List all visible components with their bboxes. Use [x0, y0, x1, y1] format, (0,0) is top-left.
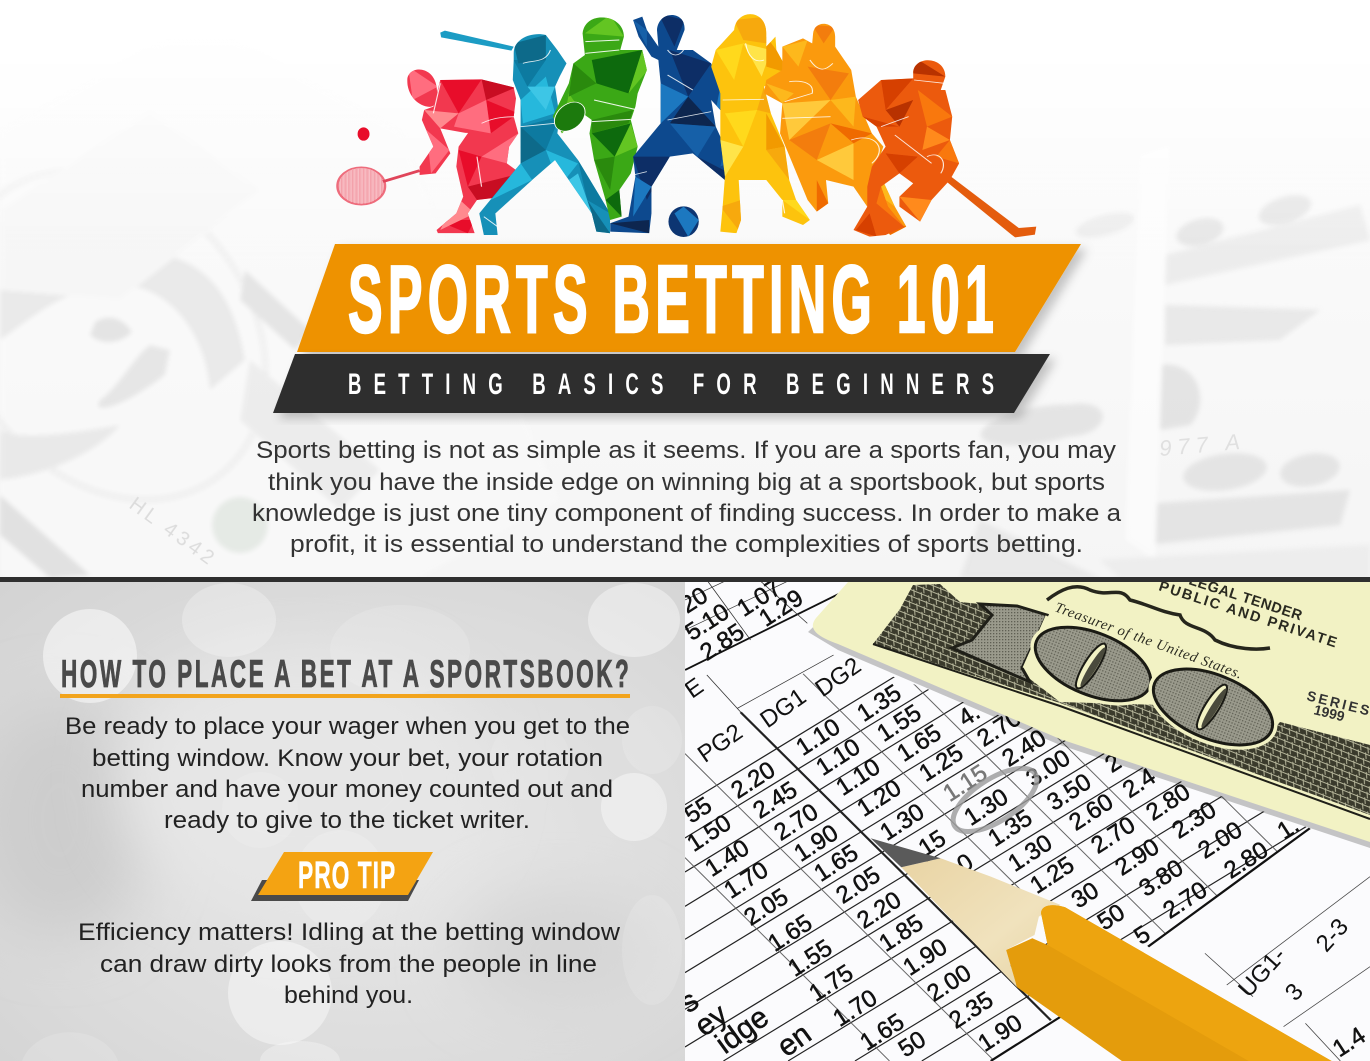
second zero	[1148, 668, 1278, 750]
faint note serial: HL 4342	[125, 493, 221, 572]
odds numbers: 30	[1067, 877, 1104, 914]
odds numbers: 2.70	[1158, 876, 1212, 924]
odds numbers: UG1-	[1233, 942, 1292, 1003]
pro tip text	[78, 919, 620, 1009]
banknote background	[0, 0, 1370, 578]
odds numbers: 1.35	[983, 804, 1037, 852]
odds numbers: E	[680, 673, 709, 704]
odds numbers: 1.85	[874, 909, 928, 957]
intro paragraph: Sports betting is not as simple as it seems. If you are a sports fan, you may	[256, 437, 1117, 464]
first zero	[1030, 626, 1152, 706]
odds numbers: 2.70	[769, 798, 823, 846]
icon: rainbow polygon sports players	[337, 10, 1036, 238]
pro tip badge: PRO TIP	[298, 854, 395, 896]
odds numbers: 2.00	[922, 959, 976, 1007]
pro tip text: behind you.	[284, 982, 413, 1009]
icon: boxer	[709, 10, 812, 233]
hundred dollar bill: LEGAL TENDER	[1187, 573, 1304, 624]
odds numbers: 15	[914, 825, 951, 862]
odds numbers: 1.30	[959, 783, 1013, 831]
odds numbers: DG2	[810, 652, 866, 703]
photo: odds sheet, hundred dollar bill and pencil	[673, 573, 1370, 1061]
odds numbers: 1.20	[852, 774, 906, 822]
subtitle text: BETTING BASICS FOR BEGINNERS	[348, 368, 994, 401]
numeral one	[952, 604, 1047, 682]
odds numbers: 1.29	[754, 584, 808, 632]
odds numbers: 2.40	[997, 724, 1051, 772]
odds numbers: 1.35	[852, 679, 906, 727]
odds numbers: 2.4	[1118, 763, 1161, 804]
body text	[65, 713, 630, 834]
heading: HOW TO PLACE A BET AT A SPORTSBOOK?	[61, 652, 629, 696]
body text: betting window. Know your bet, your rotation	[92, 745, 603, 772]
odds numbers: 2.70	[1086, 811, 1140, 859]
icon: american football player	[548, 13, 649, 223]
intro paragraph	[252, 437, 1121, 558]
hundred dollar bill: SERIES	[1305, 687, 1370, 718]
pro tip badge	[251, 852, 433, 901]
odds numbers: 3.50	[1042, 768, 1096, 816]
odds numbers: 2.20	[726, 756, 780, 804]
pro tip text: can draw dirty looks from the people in line	[100, 951, 597, 978]
odds numbers: 1.55	[783, 934, 837, 982]
odds numbers: 2.60	[1064, 788, 1118, 836]
odds numbers: 2.45	[748, 776, 802, 824]
odds numbers: 1.10	[811, 733, 865, 781]
odds numbers: 2.05	[831, 861, 885, 909]
odds numbers: 1.65	[892, 719, 946, 767]
odds numbers: PG2	[693, 719, 748, 768]
intro paragraph: knowledge is just one tiny component of finding success. In order to make a	[252, 500, 1121, 527]
odds numbers: 2.90	[1110, 833, 1164, 881]
signature	[1047, 587, 1270, 649]
odds numbers: 1.10	[831, 753, 885, 801]
faint note serial right: 977 A	[1158, 429, 1247, 461]
hundred dollar bill: 1999	[1312, 701, 1347, 724]
odds numbers: 1.30	[1003, 829, 1057, 877]
subtitle banner	[273, 354, 1050, 413]
odds numbers: 2.20	[852, 886, 906, 934]
hundred dollar bill	[808, 573, 1370, 848]
odds numbers: 1.25	[914, 739, 968, 787]
odds numbers: idge	[710, 1000, 775, 1060]
odds numbers: 2.30	[1167, 796, 1221, 844]
title banner	[297, 244, 1081, 353]
odds table grid	[685, 580, 1370, 1061]
icon: opposing boxer	[762, 20, 909, 237]
icon: hockey player with stick	[851, 57, 1036, 238]
body text: Be ready to place your wager when you get to the	[65, 713, 630, 740]
intro paragraph: think you have the inside edge on winning big at a sportsbook, but sports	[268, 469, 1105, 496]
odds numbers: 2.70	[972, 704, 1026, 752]
odds numbers: 1.30	[875, 798, 929, 846]
odds numbers: s	[673, 984, 705, 1020]
odds numbers: 2.35	[944, 986, 998, 1034]
hundred dollar bill: Treasurer of the United States.	[1053, 600, 1244, 682]
section divider	[0, 577, 1370, 582]
odds numbers: ey	[689, 998, 734, 1043]
odds numbers: 4.	[954, 699, 985, 732]
odds numbers: 2	[1100, 748, 1126, 778]
odds numbers: 0	[952, 848, 978, 878]
odds numbers: DG1	[755, 683, 811, 734]
odds numbers: 1.50	[682, 809, 736, 857]
odds numbers: 1.	[1273, 812, 1304, 845]
odds numbers: 2.85	[695, 618, 749, 666]
odds numbers: 1.90	[973, 1009, 1027, 1057]
odds numbers: 1.65	[763, 909, 817, 957]
odds numbers: 1.65	[809, 839, 863, 887]
bokeh background	[0, 583, 682, 1061]
icon: soccer player and ball	[610, 15, 725, 237]
odds numbers: 1.40	[700, 834, 754, 882]
odds numbers: 1.07	[732, 574, 786, 622]
intro paragraph: profit, it is essential to understand the complexities of sports betting.	[290, 531, 1083, 558]
odds numbers: 50	[1093, 899, 1130, 936]
odds numbers: 1.65	[855, 1008, 909, 1056]
panel: how to place a bet	[0, 582, 685, 1061]
body text: number and have your money counted out and	[81, 776, 613, 803]
icon: baseball batter	[440, 30, 615, 237]
odds numbers: 2.00	[1193, 816, 1247, 864]
odds numbers: 5.10	[680, 598, 734, 646]
odds numbers: 3	[1280, 978, 1309, 1006]
odds numbers: 3.80	[1134, 854, 1188, 902]
heading underline	[60, 694, 630, 698]
odds numbers	[673, 574, 1370, 1061]
odds numbers: 1.55	[872, 699, 926, 747]
odds numbers: 1.70	[719, 856, 773, 904]
odds numbers: 5	[1129, 920, 1155, 950]
odds numbers: 2.80	[1219, 836, 1273, 884]
icon: tennis player with racket and ball	[337, 63, 527, 237]
odds numbers: 2-3	[1311, 913, 1354, 957]
odds numbers: 1.75	[804, 959, 858, 1007]
odds numbers: 1.90	[789, 819, 843, 867]
odds numbers: 1.10	[791, 713, 845, 761]
odds numbers: 20	[676, 582, 713, 619]
odds numbers: 1.15	[938, 759, 992, 807]
pencil circle mark	[950, 766, 1040, 834]
odds numbers: 55	[680, 792, 717, 829]
odds numbers: 3.00	[1021, 744, 1075, 792]
pro tip text: Efficiency matters! Idling at the betting window	[78, 919, 620, 946]
hundred dollar bill: PUBLIC AND PRIVATE	[1157, 579, 1339, 651]
pencil	[871, 838, 1332, 1061]
odds numbers: 2.80	[1141, 778, 1195, 826]
title text: SPORTS BETTING 101	[348, 246, 994, 353]
odds numbers: 1.90	[898, 933, 952, 981]
engraved band	[873, 584, 1370, 815]
odds numbers: 1.25	[1025, 851, 1079, 899]
body text: ready to give to the ticket writer.	[164, 807, 530, 834]
odds numbers: 2.05	[739, 883, 793, 931]
odds numbers: 1.70	[828, 984, 882, 1032]
